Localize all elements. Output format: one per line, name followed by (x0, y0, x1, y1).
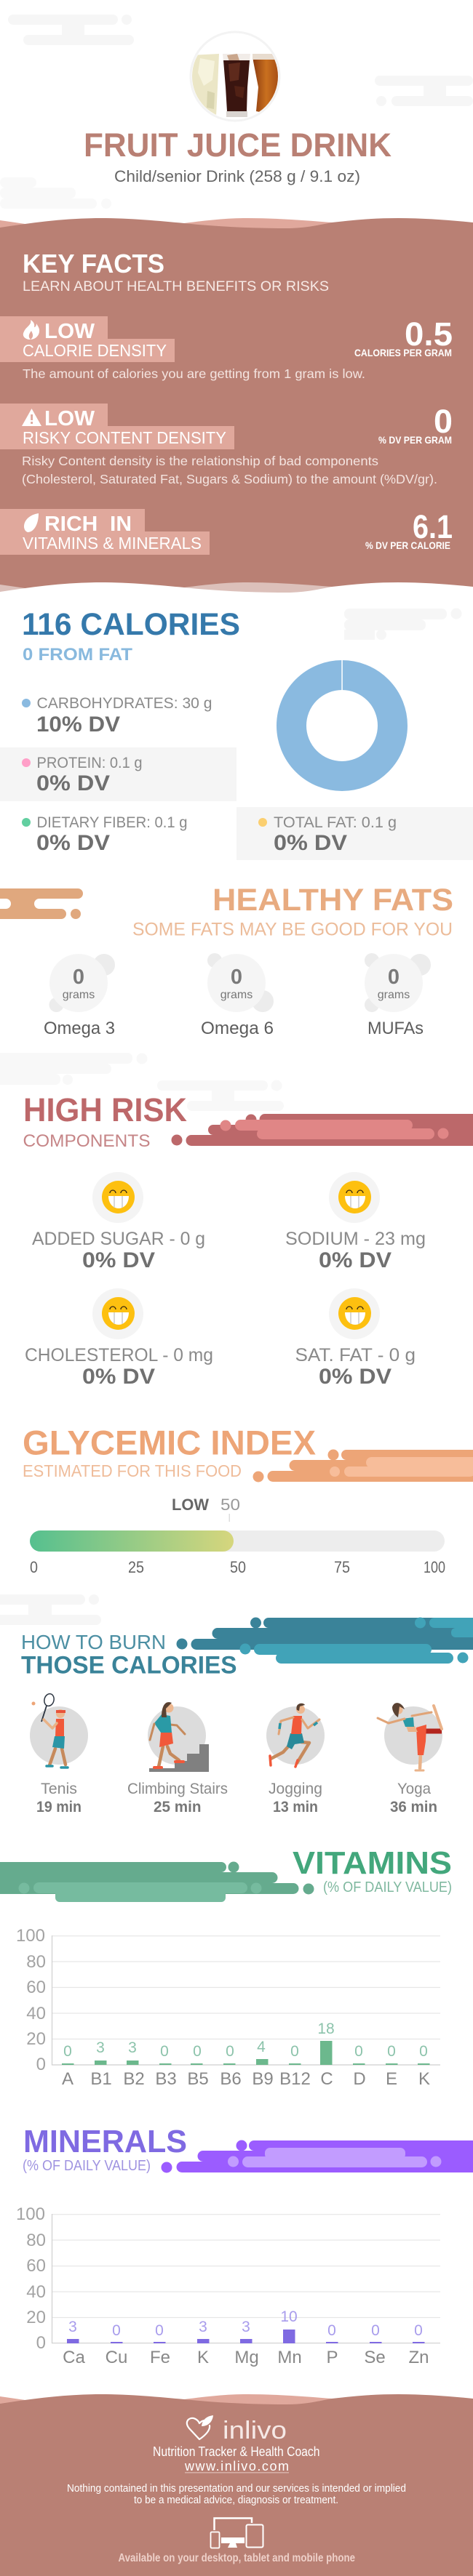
glycemic scale: 50 (230, 1558, 246, 1576)
figure: woman on stairs (149, 1702, 209, 1772)
vitamins heading: VITAMINS (293, 1845, 452, 1881)
bar chart: minerals: 0 (155, 2322, 164, 2339)
calories heading: 116 CALORIES (22, 607, 240, 642)
bar chart: vitamins: 100 (16, 1926, 45, 1946)
bar chart: vitamins: D (353, 2069, 366, 2089)
bar chart: vitamins: 0 (290, 2043, 299, 2060)
bar chart: vitamins: C (320, 2069, 333, 2089)
stat: added sugar (32, 1172, 205, 1272)
activity: tennis: Tenis (41, 1781, 77, 1797)
icon: warning triangle (22, 409, 41, 426)
bar chart: vitamins: B9 (252, 2069, 274, 2089)
footer (0, 2394, 473, 2576)
panel: high risk (23, 1091, 473, 1389)
minerals heading: MINERALS (23, 2124, 187, 2159)
logo: inlivo (187, 2415, 287, 2444)
bar chart: vitamins: 0 (160, 2043, 169, 2060)
bar chart: vitamins: 0 (36, 2055, 46, 2074)
activity: jogging: 13 min (273, 1799, 318, 1815)
burn heading (21, 1631, 237, 1680)
activity: jogging: Jogging (269, 1781, 322, 1797)
bar chart: minerals: Fe (150, 2348, 170, 2367)
bar chart: vitamins: 20 (26, 2029, 46, 2049)
bar chart: minerals: Zn (408, 2348, 429, 2367)
bar chart: vitamins: 60 (26, 1978, 46, 1997)
bar chart: vitamins: B6 (220, 2069, 242, 2089)
legend: total fat: 0% DV (274, 831, 347, 855)
bar chart: vitamins: B2 (123, 2069, 145, 2089)
stat: mufas: grams (378, 989, 410, 1001)
fact: risky content density: LOW (44, 407, 95, 430)
key facts subheading: LEARN ABOUT HEALTH BENEFITS OR RISKS (23, 278, 329, 294)
icon: flame (23, 320, 39, 340)
bar chart: minerals: 80 (26, 2231, 46, 2250)
icon: leaf (24, 513, 39, 532)
bar chart: vitamins: 0 (226, 2043, 234, 2060)
subtitle: Child/senior Drink (258 g / 9.1 oz) (114, 167, 360, 185)
activity: climbing stairs: 25 min (154, 1799, 201, 1815)
panel: how to burn (21, 1617, 473, 1815)
bar chart: minerals: K (197, 2348, 209, 2367)
fact: risky content density: % DV PER GRAM (378, 434, 452, 446)
decorative band: vitamins (0, 1861, 314, 1902)
bar chart: vitamins: 18 (317, 2021, 335, 2037)
glycemic scale: 25 (128, 1558, 144, 1576)
figure: jogger (270, 1704, 319, 1767)
glycemic value: 50 (220, 1496, 240, 1514)
bar chart: minerals: Mn (277, 2348, 302, 2367)
decorative band: minerals (162, 2140, 473, 2172)
donut chart (291, 660, 393, 777)
panel: calories (0, 607, 473, 860)
bar chart: vitamins: 0 (63, 2043, 72, 2060)
bar chart: minerals: 0 (327, 2322, 336, 2339)
fact: rich in vitamins and minerals: 6.1 (413, 508, 453, 545)
bar chart: minerals: 3 (242, 2319, 250, 2335)
stat: saturated fat (295, 1288, 416, 1389)
legend: total fat (236, 807, 473, 860)
vitamins subheading: (% OF DAILY VALUE) (323, 1879, 452, 1895)
fact: calorie density: The amount of calories you are getting from 1 gram is low. (23, 366, 365, 381)
background clouds: high risk (0, 1053, 284, 1111)
legend: dietary fiber: DIETARY FIBER: 0.1 g (36, 814, 188, 831)
high risk heading: HIGH RISK (23, 1091, 187, 1128)
availability note: Available on your desktop, tablet and mobile phone (118, 2552, 355, 2564)
legend: protein: PROTEIN: 0.1 g (36, 755, 143, 771)
healthy fats heading: HEALTHY FATS (212, 883, 453, 918)
fact: rich in vitamins and minerals: VITAMINS & MINERALS (23, 534, 202, 553)
bar chart: vitamins: B3 (155, 2069, 177, 2089)
food photo: three glasses of drink (191, 32, 280, 121)
bar chart: minerals: 10 (280, 2308, 298, 2325)
stat: cholesterol: 0% DV (82, 1365, 155, 1389)
fact: risky content density: Risky Content density is the relationship of bad components (22, 454, 378, 468)
bar chart: minerals: 0 (414, 2322, 423, 2339)
decorative band: high risk (172, 1114, 473, 1146)
bar chart: vitamins: K (418, 2069, 430, 2089)
legend: protein (0, 747, 236, 801)
bar chart: minerals: 100 (16, 2204, 45, 2224)
bar chart: minerals (16, 2204, 440, 2367)
decorative band: healthy fats (0, 888, 83, 919)
bar chart: minerals: P (326, 2348, 338, 2367)
fact: calorie density: CALORIE DENSITY (23, 341, 167, 360)
glycemic value (172, 1496, 240, 1522)
icon: grin face (338, 1181, 371, 1213)
bar chart: vitamins: 3 (96, 2039, 105, 2056)
fact: rich in vitamins and minerals (0, 508, 453, 555)
panel: minerals (16, 2124, 473, 2367)
fact: risky content density: 0 (434, 403, 453, 440)
bar chart: minerals: 60 (26, 2256, 46, 2276)
stat: omega 3 (44, 954, 115, 1038)
stat: omega 3: 0 (73, 966, 84, 989)
bar chart: vitamins: 80 (26, 1952, 46, 1972)
glycemic value: LOW (172, 1496, 209, 1514)
activity: tennis: 19 min (36, 1799, 82, 1815)
legend: total fat: TOTAL FAT: 0.1 g (274, 814, 397, 831)
website link: www.inlivo.com (184, 2459, 289, 2473)
bar chart: minerals: Ca (63, 2348, 85, 2367)
logo: inlivo: inlivo (223, 2417, 287, 2444)
stat: mufas: MUFAs (367, 1019, 424, 1038)
activity: climbing stairs: Climbing Stairs (127, 1781, 228, 1797)
activity: yoga: Yoga (397, 1781, 431, 1797)
bar chart: minerals: 0 (36, 2333, 46, 2353)
fact: calorie density: CALORIES PER GRAM (354, 347, 452, 358)
bar chart: minerals: 0 (371, 2322, 380, 2339)
fact: risky content density: RISKY CONTENT DENSITY (23, 428, 226, 447)
high risk subheading: COMPONENTS (23, 1131, 150, 1151)
stat: omega 3: grams (63, 989, 95, 1001)
stat: cholesterol: CHOLESTEROL - 0 mg (25, 1345, 213, 1365)
decorative band: burn (176, 1617, 473, 1664)
panel: glycemic index (23, 1424, 473, 1576)
bar chart: minerals: 3 (68, 2319, 77, 2335)
stat: added sugar: ADDED SUGAR - 0 g (32, 1229, 205, 1249)
activity: jogging (266, 1704, 325, 1815)
glycemic bar (30, 1530, 445, 1552)
icon: devices (211, 2519, 263, 2548)
figure: yoga pose (378, 1703, 442, 1770)
bar chart: vitamins (16, 1926, 440, 2089)
disclaimer (67, 2482, 406, 2506)
disclaimer: Nothing contained in this presentation and our services is intended or implied (67, 2482, 406, 2495)
icon: grin face (102, 1181, 135, 1213)
activity: climbing stairs (127, 1702, 228, 1815)
minerals subheading: (% OF DAILY VALUE) (23, 2158, 151, 2174)
decorative band: glycemic index (253, 1450, 473, 1482)
bar chart: minerals: 0 (112, 2322, 121, 2339)
bar chart: minerals: Cu (106, 2348, 127, 2367)
fact: rich in vitamins and minerals: RICH IN (44, 513, 132, 536)
figure: tennis player (32, 1693, 68, 1768)
calories from fat: 0 FROM FAT (23, 645, 132, 665)
stat: cholesterol (25, 1288, 213, 1389)
stat: omega 6: Omega 6 (201, 1019, 274, 1038)
stat: omega 6 (201, 953, 274, 1038)
tagline: Nutrition Tracker & Health Coach (153, 2444, 320, 2459)
bar chart: minerals: Mg (234, 2348, 259, 2367)
fact: calorie density: 0.5 (405, 316, 453, 353)
fact: risky content density (0, 403, 453, 486)
legend: carbohydrates: CARBOHYDRATES: 30 g (36, 695, 212, 712)
bar chart: vitamins: 0 (387, 2043, 396, 2060)
bar chart: vitamins: 0 (354, 2043, 363, 2060)
fact: calorie density: LOW (44, 320, 95, 343)
stat: sodium: 0% DV (319, 1248, 391, 1272)
glycemic scale (30, 1558, 445, 1576)
legend: dietary fiber: 0% DV (36, 831, 110, 855)
fact: rich in vitamins and minerals: % DV PER CALORIE (365, 539, 450, 551)
bar chart: minerals: Se (364, 2348, 386, 2367)
stat: sodium: SODIUM - 23 mg (285, 1229, 426, 1249)
disclaimer: to be a medical advice, diagnosis or treatment. (134, 2494, 338, 2506)
bar chart: minerals: 20 (26, 2308, 46, 2327)
stat: omega 3: Omega 3 (44, 1019, 115, 1038)
key facts heading: KEY FACTS (23, 249, 164, 278)
healthy fats subheading: SOME FATS MAY BE GOOD FOR YOU (132, 919, 453, 939)
stat: saturated fat: SAT. FAT - 0 g (295, 1345, 416, 1365)
fact: calorie density (0, 316, 453, 381)
burn heading: HOW TO BURN (21, 1631, 166, 1653)
background cloud: burn (0, 1594, 101, 1625)
stat: omega 6: 0 (231, 966, 242, 989)
bar chart: vitamins: A (62, 2069, 73, 2089)
legend: dietary fiber (22, 814, 188, 855)
glycemic index heading: GLYCEMIC INDEX (23, 1424, 316, 1461)
glycemic scale: 100 (424, 1558, 445, 1576)
activity: tennis (30, 1693, 88, 1815)
panel: healthy fats (0, 883, 453, 1038)
panel: key facts (0, 218, 473, 611)
stat: mufas: 0 (388, 966, 400, 989)
panel: vitamins (0, 1845, 452, 2089)
bar chart: minerals: 3 (199, 2319, 207, 2335)
bar chart: vitamins: B5 (187, 2069, 209, 2089)
bar chart: vitamins: 3 (128, 2039, 137, 2056)
legend: carbohydrates (22, 695, 212, 737)
glycemic index subheading: ESTIMATED FOR THIS FOOD (23, 1461, 242, 1480)
icon: grin face (338, 1297, 371, 1330)
legend: protein: 0% DV (36, 771, 110, 795)
glycemic scale: 75 (334, 1558, 350, 1576)
glycemic scale: 0 (30, 1558, 38, 1576)
stat: added sugar: 0% DV (82, 1248, 155, 1272)
bar chart: vitamins: 40 (26, 2004, 46, 2023)
legend: carbohydrates: 10% DV (36, 713, 120, 737)
bar chart: minerals: 40 (26, 2282, 46, 2302)
bar chart: vitamins: 0 (193, 2043, 202, 2060)
bar chart: vitamins: B12 (279, 2069, 311, 2089)
activity: yoga: 36 min (390, 1799, 437, 1815)
stat: omega 6: grams (220, 989, 253, 1001)
burn heading: THOSE CALORIES (21, 1652, 237, 1680)
stat: sodium (285, 1172, 426, 1272)
title: FRUIT JUICE DRINK (84, 127, 391, 164)
background clouds: header (0, 15, 473, 209)
stat: saturated fat: 0% DV (319, 1365, 391, 1389)
bar chart: vitamins: 4 (257, 2039, 266, 2055)
stat: mufas (365, 953, 431, 1038)
bar chart: vitamins: B1 (90, 2069, 112, 2089)
icon: grin face (102, 1297, 135, 1330)
fact: risky content density: (Cholesterol, Saturated Fat, Sugars & Sodium) to the amount (%DV/gr). (22, 472, 437, 486)
activity: yoga (378, 1703, 442, 1815)
bar chart: vitamins: 0 (419, 2043, 428, 2060)
bar chart: vitamins: E (386, 2069, 397, 2089)
